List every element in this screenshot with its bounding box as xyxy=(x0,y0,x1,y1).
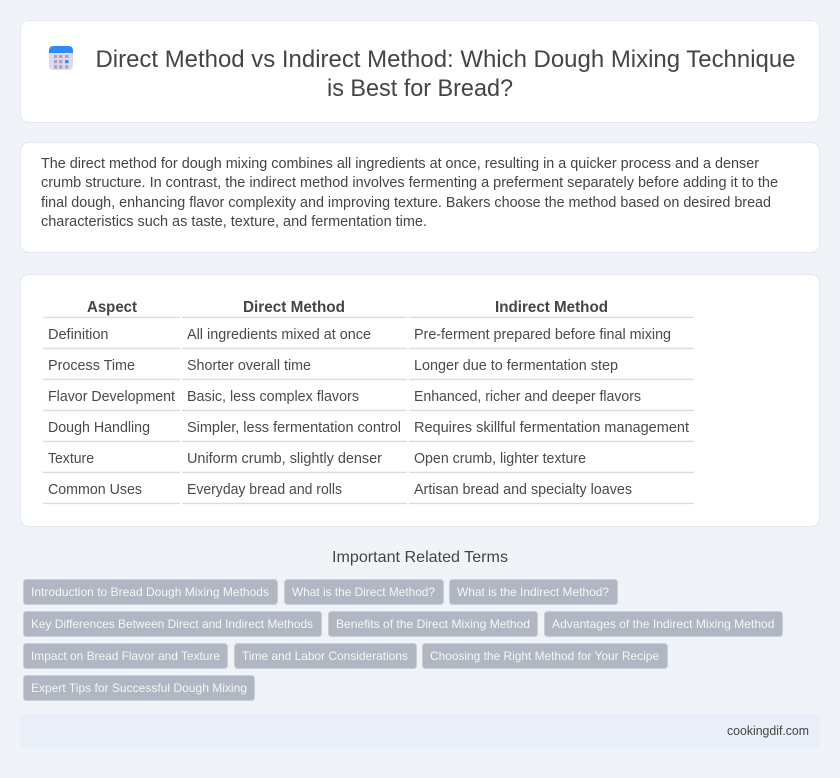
panel: summary paragraph xyxy=(20,142,820,252)
text block: summary: The direct method for dough mixing combines all ingredients at once, resulting in a quicker process and a denser xyxy=(41,156,759,172)
table row: definition: All ingredients mixed at once xyxy=(187,327,371,343)
table row: dough handling: Dough Handling xyxy=(48,420,150,436)
text block: summary xyxy=(41,156,778,230)
text block: summary: crumb structure. In contrast, the indirect method involves fermenting a preferment separately before adding it to the xyxy=(41,175,778,191)
tag list: related terms: Advantages of the Indirect Mixing Method xyxy=(552,617,774,631)
table row: flavor development: Basic, less complex flavors xyxy=(187,389,359,405)
panel: title card xyxy=(20,20,820,122)
table header: Aspect xyxy=(87,299,138,316)
table header xyxy=(87,299,608,316)
heading: related terms: Important Related Terms xyxy=(332,549,508,566)
table row: flavor development: Flavor Development xyxy=(48,389,175,405)
tag list: related terms: Choosing the Right Method for Your Recipe xyxy=(430,649,659,663)
panel: comparison table xyxy=(20,274,820,526)
icon: calendar xyxy=(49,46,73,70)
tag list: related terms: Time and Labor Considerations xyxy=(242,649,408,663)
footer xyxy=(20,714,820,748)
text block: summary: final dough, enhancing flavor complexity and improving texture. Bakers choose the method based on desired bread xyxy=(41,195,771,211)
tag list: related terms xyxy=(24,580,782,700)
table row: texture: Open crumb, lighter texture xyxy=(414,451,586,467)
tag list: related terms: Impact on Bread Flavor and Texture xyxy=(31,649,220,663)
table row: flavor development: Enhanced, richer and deeper flavors xyxy=(414,389,641,405)
table row: dough handling xyxy=(48,420,689,436)
tag list: related terms: Benefits of the Direct Mixing Method xyxy=(336,617,530,631)
table row: process time: Longer due to fermentation step xyxy=(414,358,618,374)
table row: definition xyxy=(48,327,671,343)
table row: flavor development xyxy=(48,389,641,405)
table row: texture: Texture xyxy=(48,451,94,467)
table row: common uses xyxy=(48,482,632,498)
table row: definition: Definition xyxy=(48,327,108,343)
title xyxy=(96,46,796,102)
table row: common uses: Common Uses xyxy=(48,482,142,498)
table row: common uses: Everyday bread and rolls xyxy=(187,482,342,498)
table header: Direct Method xyxy=(243,299,345,316)
table row: common uses: Artisan bread and specialty loaves xyxy=(414,482,632,498)
tag list: related terms: Expert Tips for Successful Dough Mixing xyxy=(31,681,247,695)
table row: texture xyxy=(48,451,586,467)
table row: process time xyxy=(48,358,618,374)
footer: cookingdif.com xyxy=(727,723,809,738)
text block: summary: characteristics such as taste, texture, and fermentation time. xyxy=(41,214,427,230)
table row: texture: Uniform crumb, slightly denser xyxy=(187,451,382,467)
table row: dough handling: Simpler, less fermentation control xyxy=(187,420,401,436)
table row: definition: Pre-ferment prepared before final mixing xyxy=(414,327,671,343)
title: is Best for Bread? xyxy=(327,75,513,102)
table header: Indirect Method xyxy=(495,299,608,316)
title: Direct Method vs Indirect Method: Which Dough Mixing Technique xyxy=(96,46,796,73)
tag list: related terms: Introduction to Bread Dough Mixing Methods xyxy=(31,585,269,599)
table row: process time: Shorter overall time xyxy=(187,358,311,374)
table row: dough handling: Requires skillful fermentation management xyxy=(414,420,689,436)
tag list: related terms: Key Differences Between Direct and Indirect Methods xyxy=(31,617,313,631)
tag list: related terms: What is the Direct Method? xyxy=(292,585,435,599)
table row: process time: Process Time xyxy=(48,358,135,374)
tag list: related terms: What is the Indirect Method? xyxy=(457,585,609,599)
